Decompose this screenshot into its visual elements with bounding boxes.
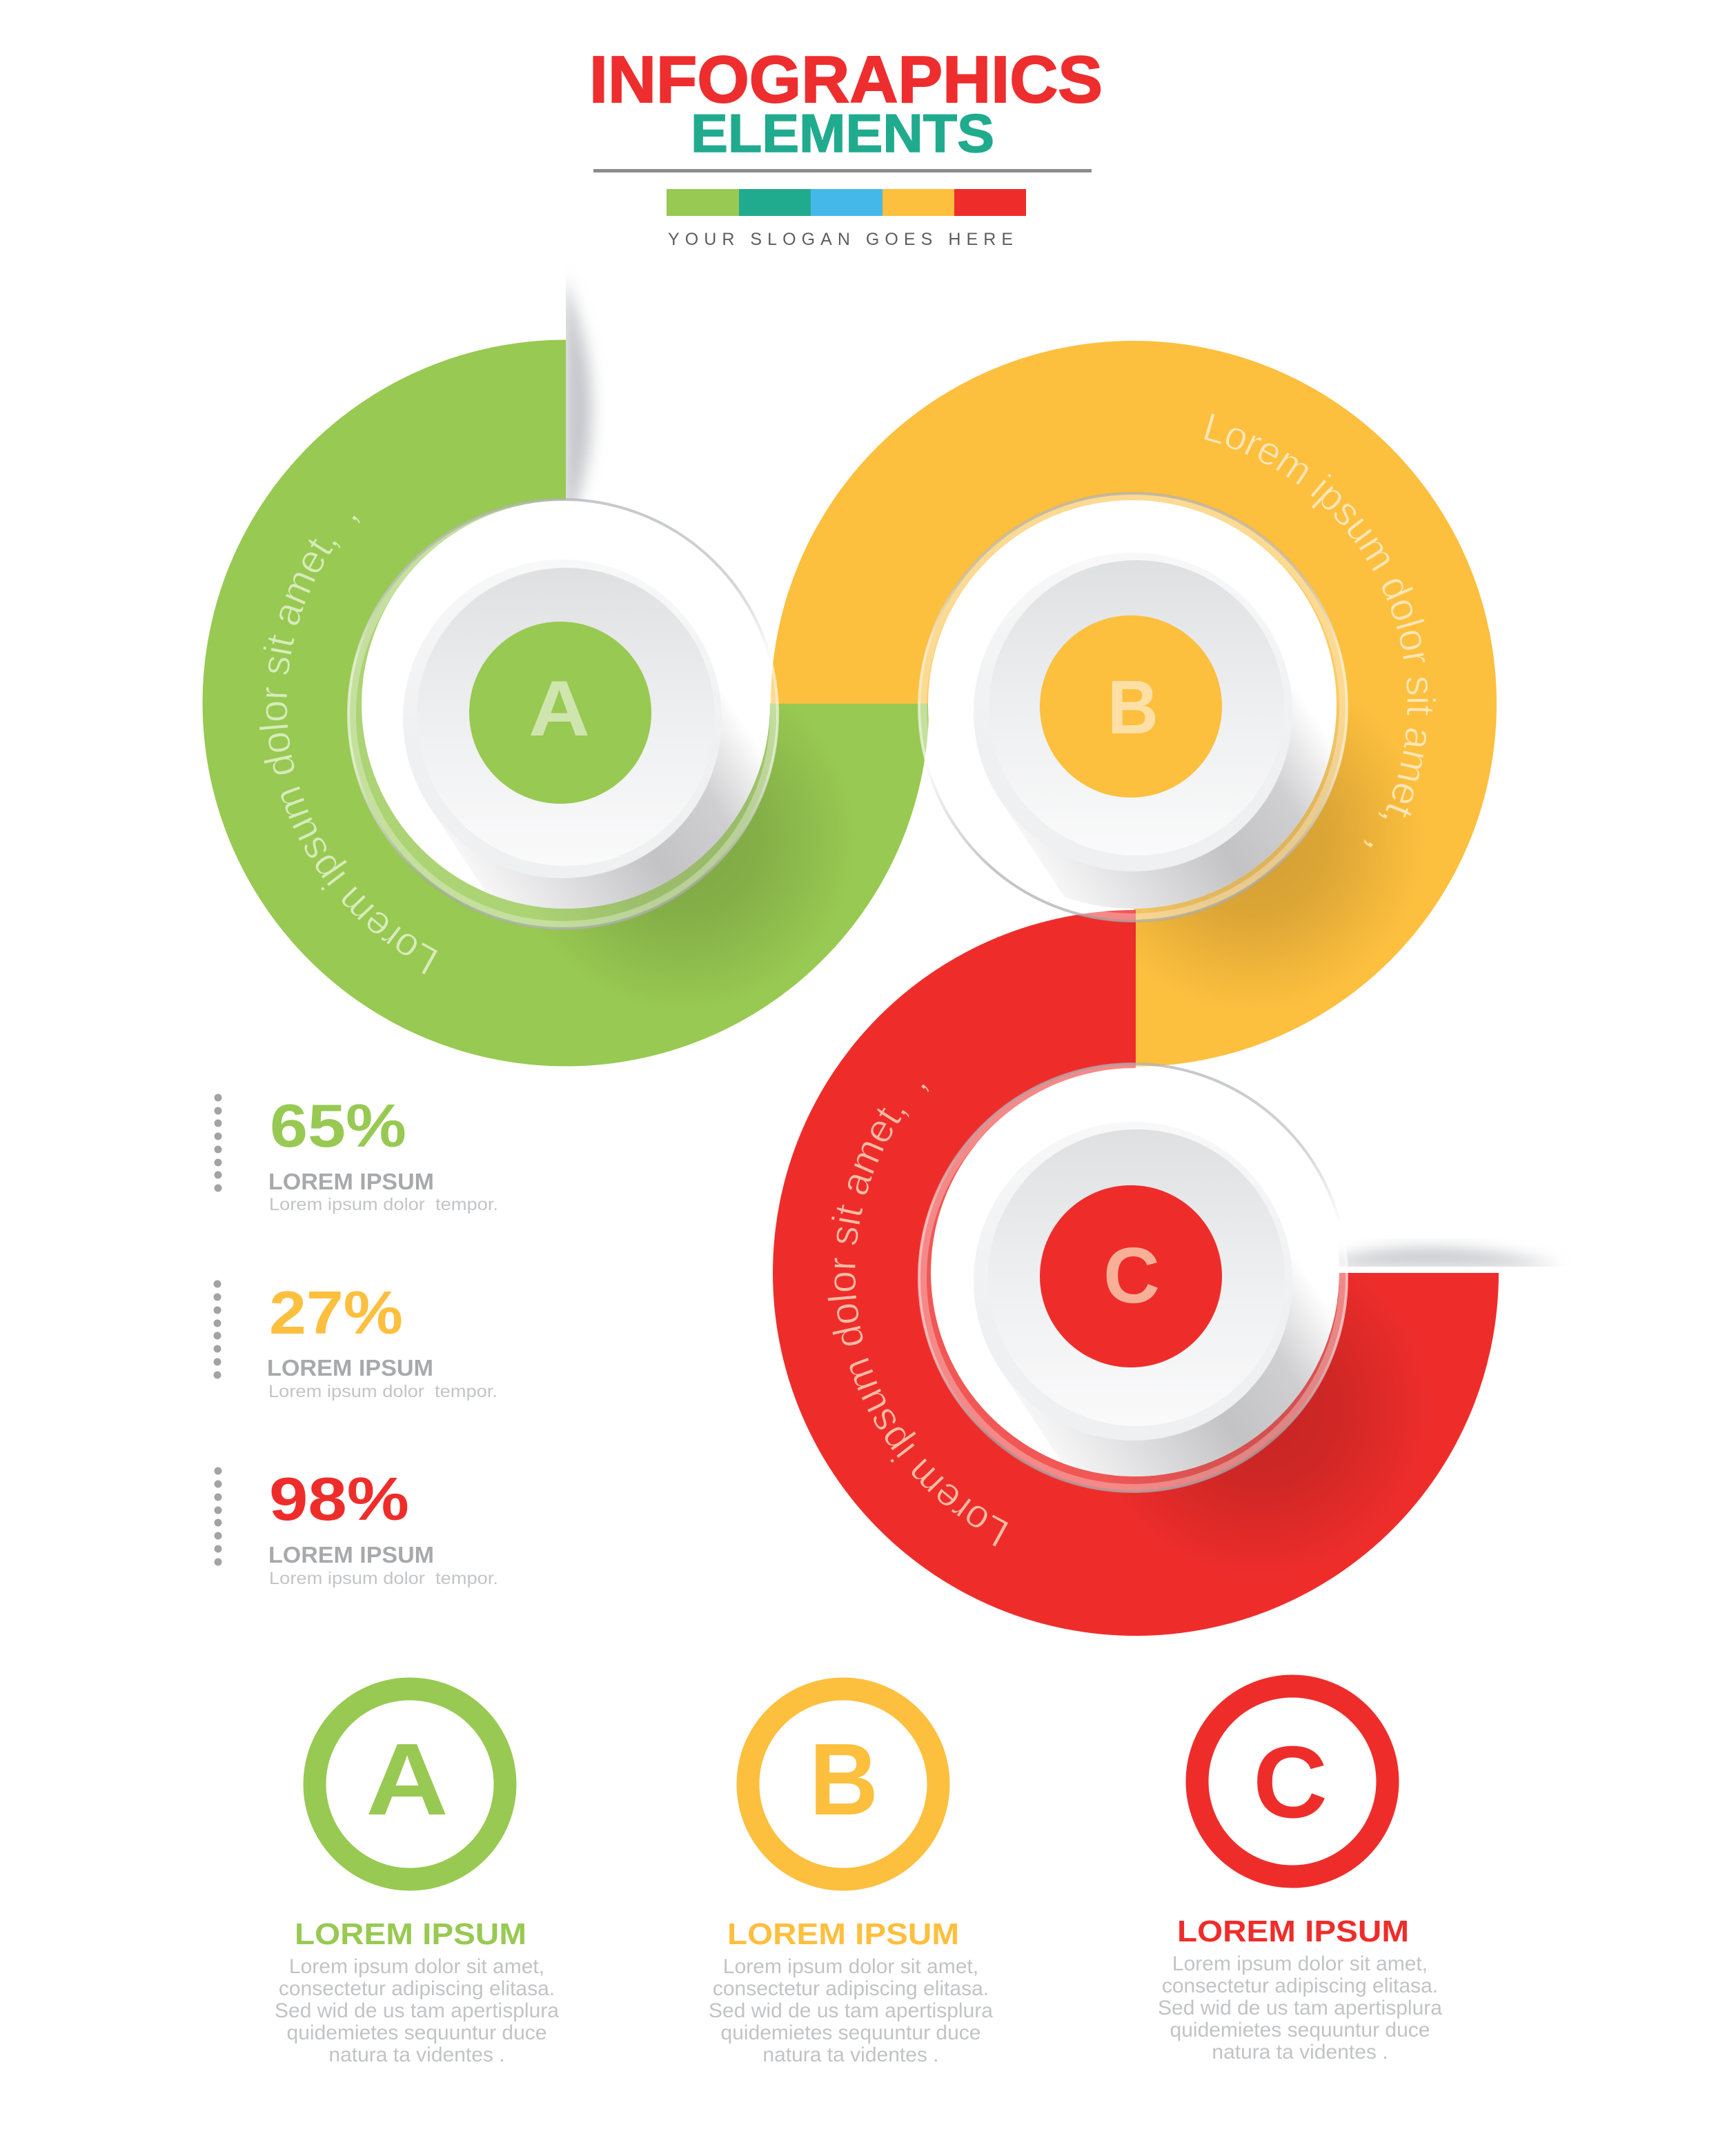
shadow beside segment C [1311,1248,1561,1267]
segment C red arc [773,910,1499,1636]
cast shadow on red [1137,1292,1406,1554]
button C [918,1062,1348,1510]
segment A green arc [202,339,929,1067]
curved text A: Lorem ipsum dolor sit amet, , [259,516,437,974]
legend body C: Sed wid de us tam apertisplura [1158,1997,1442,2019]
legend A [275,1689,559,2066]
legend body C [1158,1952,1442,2064]
divider line [593,169,1092,172]
legend body C: natura ta videntes . [1212,2041,1388,2064]
dotted marker [214,1280,221,1378]
letter B: B [1107,665,1159,750]
legend body C: Lorem ipsum dolor sit amet, [1172,1952,1428,1975]
legend body C: consectetur adipiscing elitasa. [1162,1975,1438,1997]
legend body A: natura ta videntes . [328,2044,505,2066]
dotted marker [214,1467,222,1566]
ring icon B [748,1689,938,1879]
legend body A: quidemietes sequuntur duce [287,2021,546,2044]
header [589,43,1103,249]
stat 27% [214,1278,497,1401]
description: Lorem ipsum dolor tempor. [268,1382,497,1401]
curved text B: Lorem ipsum dolor sit amet, , [1204,413,1436,848]
ring icon A [315,1689,505,1879]
legend body A: Sed wid de us tam apertisplura [275,1999,559,2022]
title: INFOGRAPHICS [589,43,1103,117]
segment B yellow arc [771,341,1497,1067]
legend body B [709,1955,993,2066]
shadow above segment A [563,276,592,535]
badge C [1040,1185,1222,1367]
dotted marker [214,1094,222,1192]
ring icon C [1197,1686,1388,1877]
label: LOREM IPSUM [267,1355,433,1381]
colour bar [667,189,1026,216]
stat 65% [214,1091,498,1214]
value: 98% [269,1465,409,1533]
curved text C: Lorem ipsum dolor sit amet, , [828,1085,1008,1547]
label: LOREM IPSUM [268,1542,434,1567]
slogan: YOUR SLOGAN GOES HERE [668,230,1013,249]
value: 27% [269,1278,403,1347]
legend heading B: LOREM IPSUM [727,1917,959,1951]
label: LOREM IPSUM [268,1169,434,1194]
letter C: C [1103,1232,1160,1320]
letter A: A [366,1723,448,1837]
legend heading A: LOREM IPSUM [295,1917,526,1951]
legend heading C: LOREM IPSUM [1177,1915,1409,1948]
legend body A: consectetur adipiscing elitasa. [279,1977,555,2000]
description: Lorem ipsum dolor tempor. [269,1569,498,1588]
legend body B: Lorem ipsum dolor sit amet, [723,1955,978,1978]
legend body B: quidemietes sequuntur duce [721,2021,980,2044]
letter A: A [529,665,590,753]
subtitle: ELEMENTS [691,103,994,164]
legend body B: consectetur adipiscing elitasa. [713,1977,989,2000]
letter C: C [1253,1725,1328,1839]
legend B [709,1689,993,2066]
badge A [469,622,651,804]
button B [918,492,1348,941]
letter B: B [809,1723,878,1837]
legend body A [275,1955,559,2066]
value: 65% [270,1091,406,1160]
badge B [1040,615,1222,798]
legend body B: natura ta videntes . [762,2044,939,2066]
legend body B: Sed wid de us tam apertisplura [709,1999,993,2022]
cast shadow on yellow [1134,723,1401,987]
cast shadow on green [573,734,825,980]
legend C [1158,1686,1442,2064]
legend body C: quidemietes sequuntur duce [1170,2019,1430,2041]
stat 98% [214,1465,498,1588]
legend body A: Lorem ipsum dolor sit amet, [289,1955,544,1978]
description: Lorem ipsum dolor tempor. [269,1195,498,1214]
button A [347,498,779,948]
